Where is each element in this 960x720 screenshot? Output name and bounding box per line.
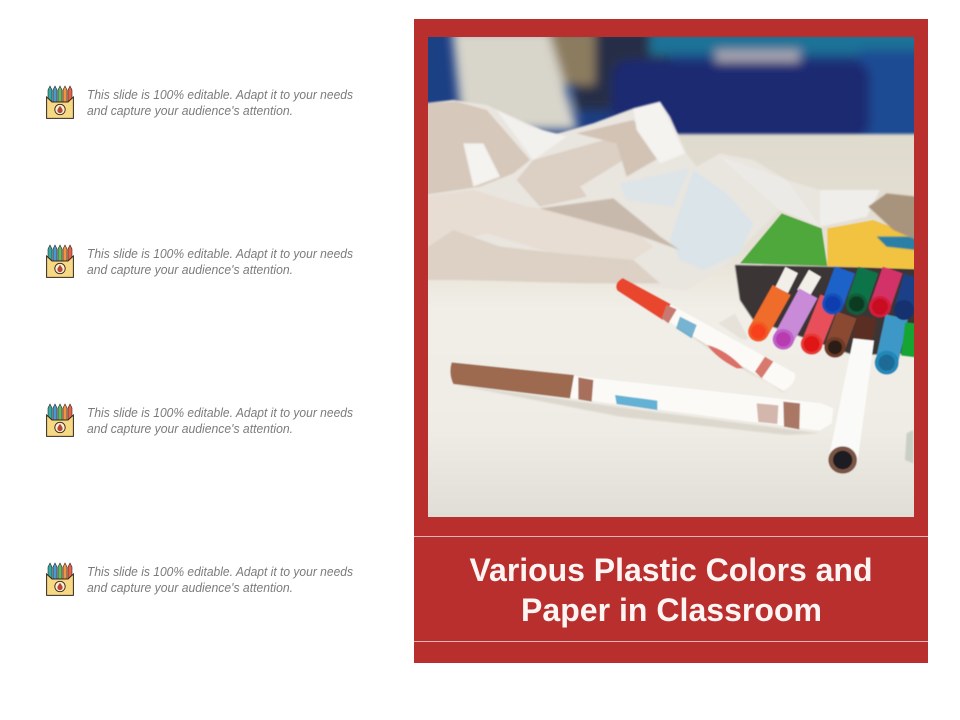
icon: crayon box — [47, 563, 73, 595]
text block 4: and capture your audience's attention. — [87, 581, 293, 595]
navy marker — [904, 277, 913, 310]
list item 4 — [47, 563, 353, 595]
white marker bodies — [782, 270, 792, 290]
brown marker on table — [450, 362, 833, 435]
photo background: blurred classroom — [420, 25, 930, 524]
red marker — [812, 298, 830, 344]
orange marker — [758, 290, 782, 332]
markers in box — [748, 270, 914, 375]
text block 3: This slide is 100% editable. Adapt it to your needs — [87, 406, 353, 420]
divider bottom — [414, 641, 928, 642]
panel: red card — [414, 19, 928, 663]
divider top — [414, 536, 928, 537]
marker box — [735, 193, 917, 355]
text block 1: and capture your audience's attention. — [87, 104, 293, 118]
back row tips — [862, 317, 867, 343]
icon: crayon box — [47, 245, 73, 277]
title — [470, 552, 872, 628]
box interior — [735, 265, 917, 355]
text block 3: and capture your audience's attention. — [87, 422, 293, 436]
crumpled paper — [423, 100, 880, 290]
list item 3 — [47, 404, 353, 436]
icon: crayon box — [47, 404, 73, 436]
box flap green — [740, 213, 827, 266]
purple marker — [783, 293, 808, 339]
text block 1: This slide is 100% editable. Adapt it to your needs — [87, 88, 353, 102]
white marker upright — [828, 338, 874, 474]
title: Paper in Classroom — [521, 592, 822, 628]
red marker on table — [616, 278, 795, 393]
brown marker — [835, 315, 847, 347]
box flap yellow — [827, 220, 917, 269]
title: Various Plastic Colors and — [470, 552, 872, 588]
text block 4: This slide is 100% editable. Adapt it to your needs — [87, 565, 353, 579]
paper scrap under markers — [718, 313, 913, 463]
green marker — [857, 270, 868, 304]
icon: crayon box — [47, 86, 73, 118]
list item 1 — [47, 86, 353, 118]
text block 2: and capture your audience's attention. — [87, 263, 293, 277]
list item 2 — [47, 245, 353, 277]
photo: markers and crumpled paper — [420, 25, 930, 524]
text block 2: This slide is 100% editable. Adapt it to your needs — [87, 247, 353, 261]
pink marker — [880, 270, 893, 307]
blue marker — [833, 270, 845, 304]
